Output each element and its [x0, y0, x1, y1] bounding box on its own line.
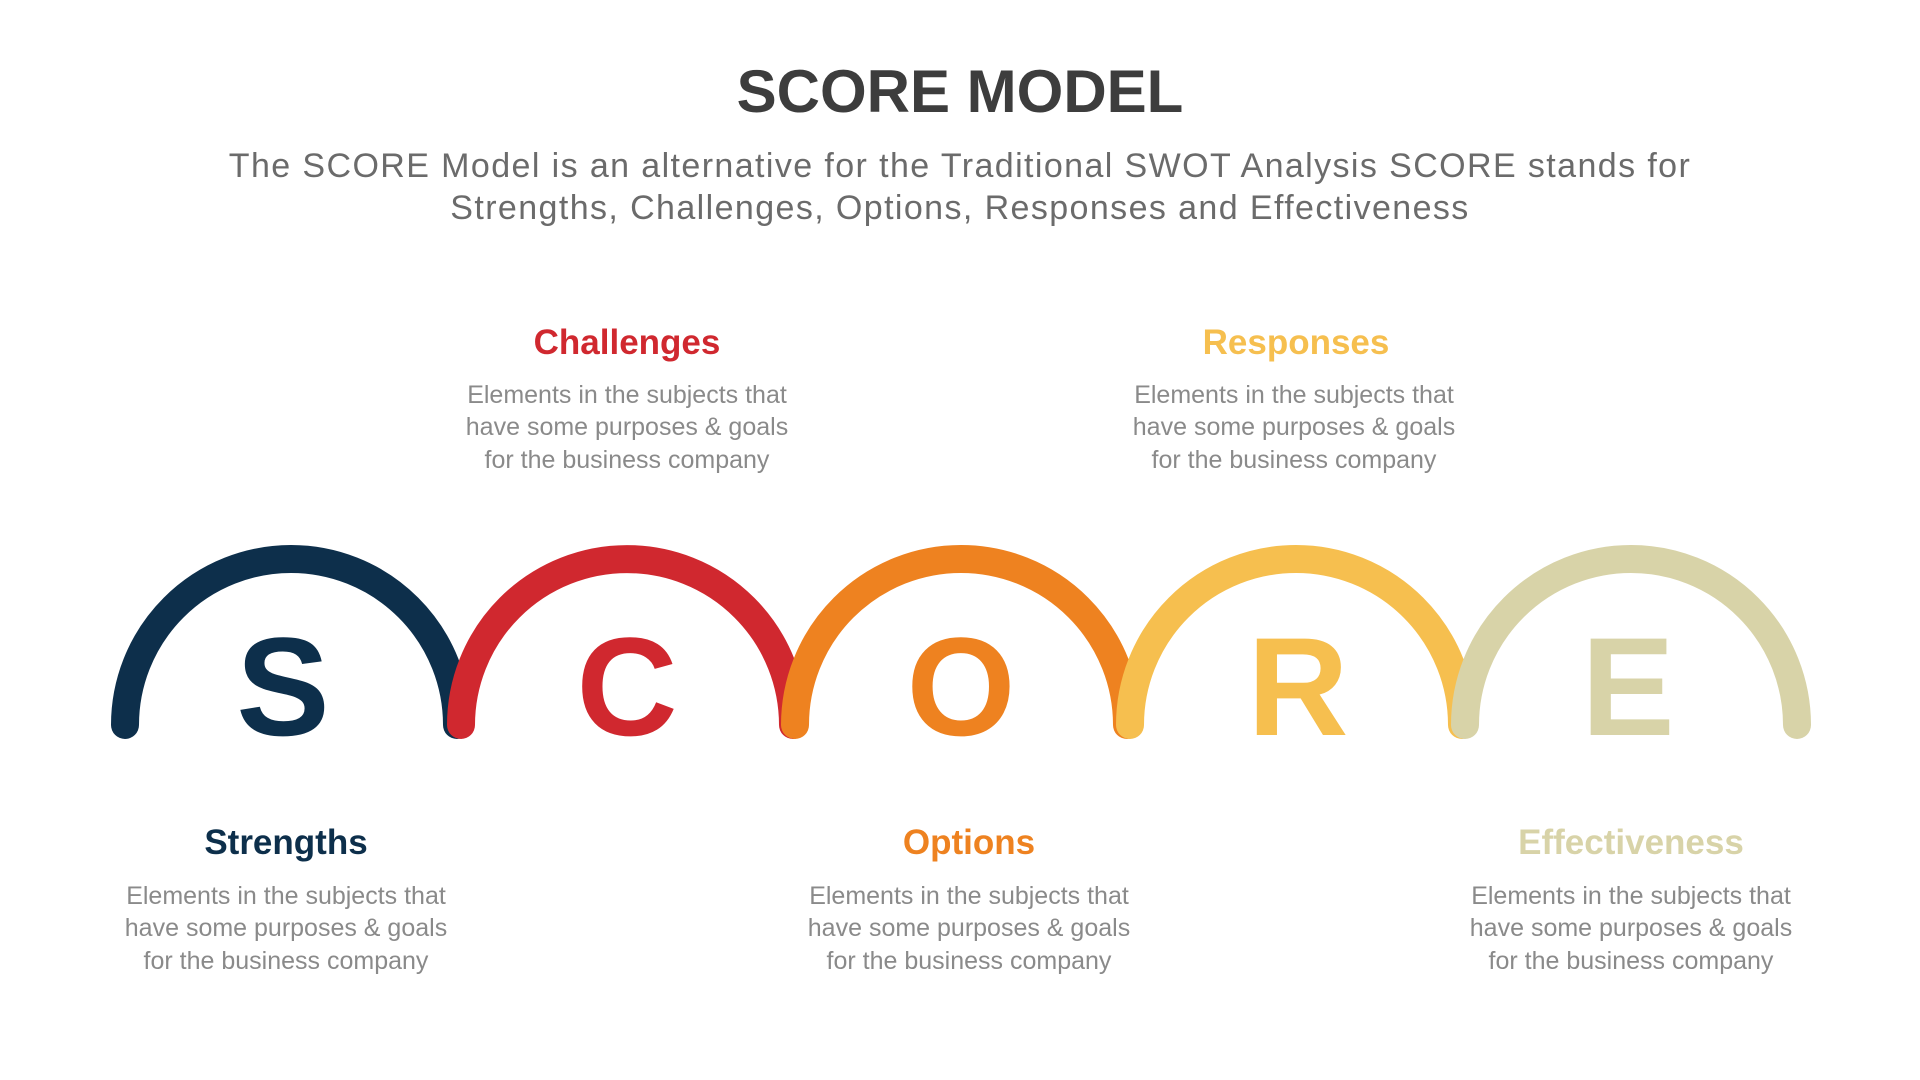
arc: C — [461, 559, 793, 725]
block: Options: for the business company — [827, 947, 1112, 975]
arc: R — [1130, 559, 1462, 725]
block: Responses: Elements in the subjects that — [1134, 381, 1454, 409]
block: Strengths: Strengths — [204, 823, 368, 862]
block: Challenges: Challenges — [534, 323, 720, 362]
block: Effectiveness: for the business company — [1489, 947, 1774, 975]
letters — [236, 608, 1675, 765]
block: Options: Options — [903, 823, 1035, 862]
block: Options: have some purposes & goals — [808, 914, 1130, 942]
block: Challenges: have some purposes & goals — [466, 413, 788, 441]
block: Responses: for the business company — [1152, 446, 1437, 474]
arc: O — [795, 559, 1127, 725]
letters: O — [907, 608, 1015, 765]
block: Strengths: have some purposes & goals — [125, 914, 447, 942]
block: Effectiveness: Effectiveness — [1518, 823, 1744, 862]
block: Strengths: Elements in the subjects that — [126, 882, 446, 910]
block: Responses — [1133, 323, 1455, 474]
letters: C — [576, 608, 678, 765]
block: Options — [808, 823, 1130, 975]
letters: S — [236, 608, 330, 765]
subtitle — [229, 147, 1691, 227]
subtitle: Strengths, Challenges, Options, Responses and Effectiveness — [450, 189, 1470, 227]
block: Strengths — [125, 823, 447, 975]
block: Challenges: for the business company — [485, 446, 770, 474]
title: SCORE MODEL — [737, 58, 1183, 125]
arc: S — [125, 559, 457, 725]
block: Effectiveness: have some purposes & goals — [1470, 914, 1792, 942]
letters: R — [1247, 608, 1349, 765]
arc: E — [1465, 559, 1797, 725]
block: Challenges — [466, 323, 788, 474]
block: Options: Elements in the subjects that — [809, 882, 1129, 910]
block: Responses: have some purposes & goals — [1133, 413, 1455, 441]
block: Strengths: for the business company — [144, 947, 429, 975]
block: Responses: Responses — [1203, 323, 1389, 362]
block: Challenges: Elements in the subjects that — [467, 381, 787, 409]
block: Effectiveness: Elements in the subjects that — [1471, 882, 1791, 910]
block: Effectiveness — [1470, 823, 1792, 975]
letters: E — [1581, 608, 1675, 765]
subtitle: The SCORE Model is an alternative for the Traditional SWOT Analysis SCORE stands for — [229, 147, 1691, 185]
